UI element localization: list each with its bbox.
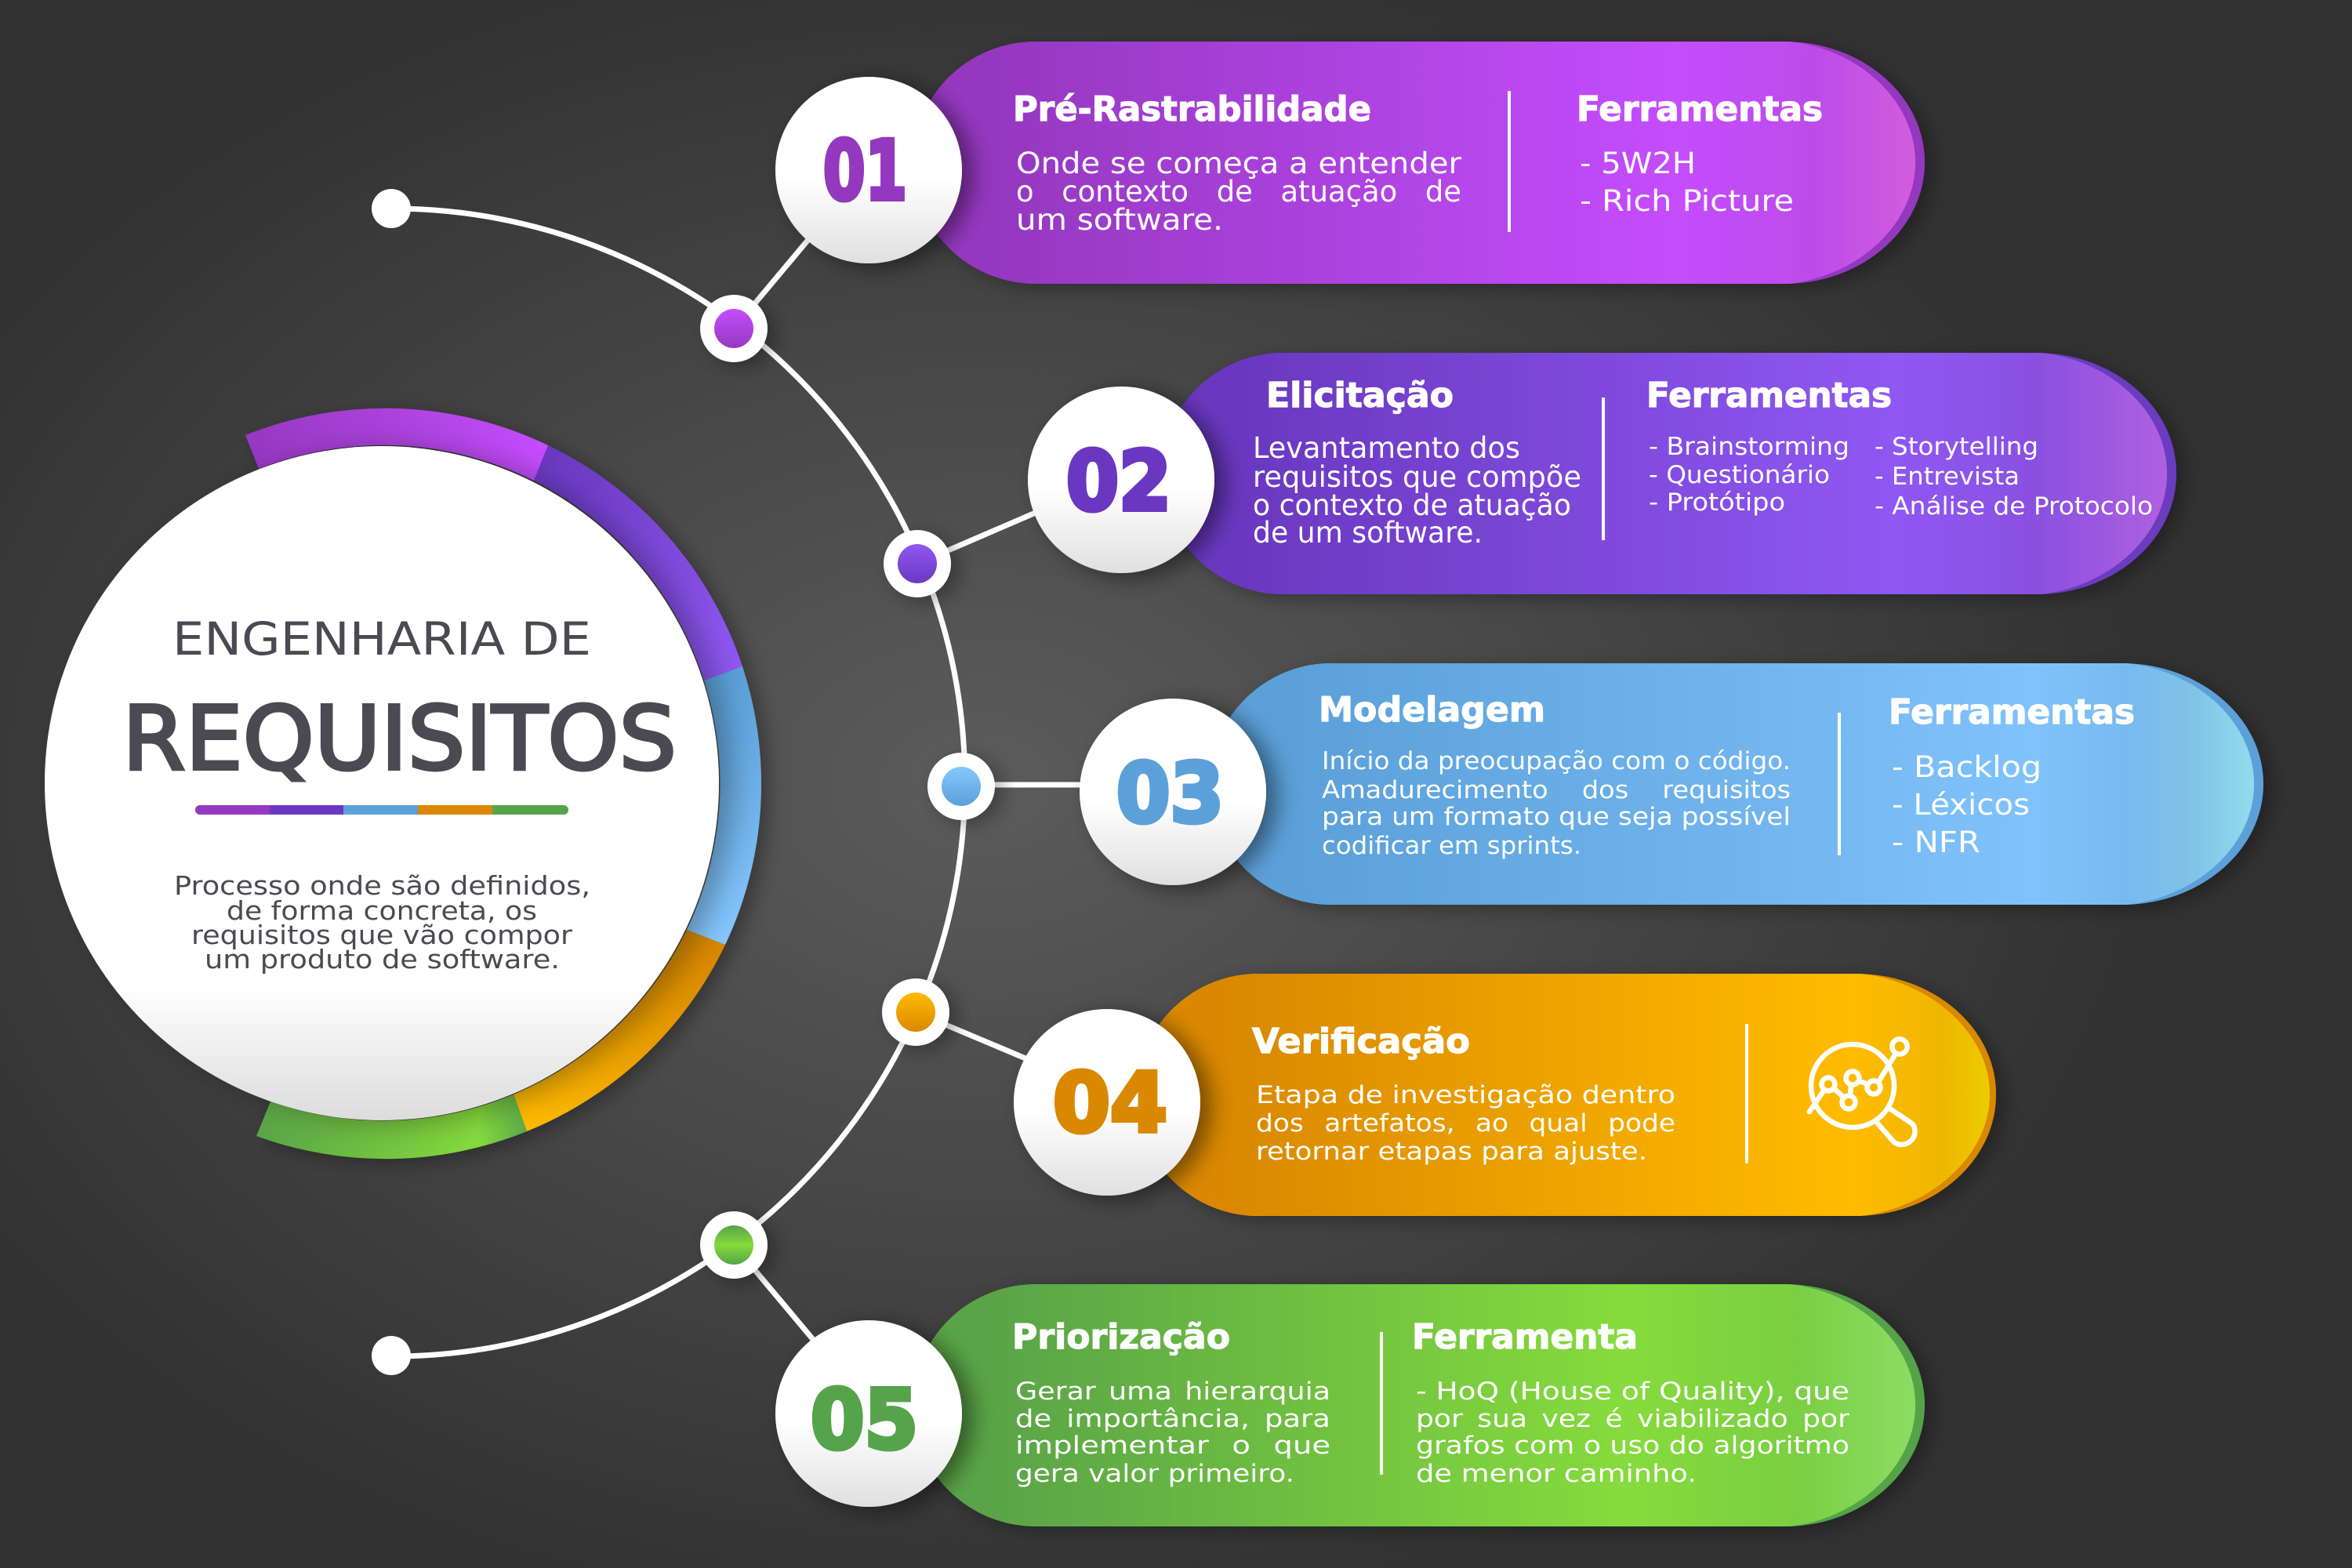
description: Início da preocupação com o código.: [1322, 747, 1791, 775]
icon: magnifier with chart: [1809, 1039, 1915, 1145]
tools description: - HoQ (House of Quality), que: [1416, 1377, 1849, 1406]
description: de importância, para: [1015, 1405, 1330, 1433]
heading: Modelagem: [1319, 690, 1545, 730]
central ring: five coloured arc segments: [245, 408, 761, 1159]
tools list: - 5W2H: [1580, 147, 1696, 180]
description: Amadurecimento dos requisitos: [1322, 776, 1791, 804]
node 01: [700, 295, 768, 362]
node 03: [927, 753, 995, 820]
tools list column one: - Brainstorming: [1649, 433, 1849, 461]
description: [1015, 1377, 1330, 1488]
central circle panel: [45, 446, 719, 1120]
arc end dot top: [372, 189, 411, 228]
number badge 04: 04: [1053, 1055, 1167, 1151]
panel 01: Pré-Rastrabilidade: [775, 42, 1925, 284]
main arc: [391, 209, 965, 1356]
divider: [1838, 713, 1841, 855]
description: de forma concreta, os: [227, 895, 537, 926]
tools list: [1892, 750, 2042, 859]
connector 05: [734, 1245, 815, 1342]
node 05: [700, 1211, 768, 1279]
tools description: grafos com o uso do algoritmo: [1416, 1432, 1849, 1460]
heading: Elicitação: [1266, 376, 1454, 416]
description: [174, 870, 590, 975]
tools list column two: [1875, 433, 2153, 521]
ring segment: purple: [245, 408, 548, 481]
description: [1016, 147, 1462, 237]
panel 05: Priorização: [775, 1284, 1925, 1526]
description: [1256, 1081, 1675, 1166]
pill 05: [913, 1284, 1925, 1526]
connector 01: [734, 231, 815, 328]
divider: [1508, 91, 1511, 232]
description: retornar etapas para ajuste.: [1256, 1138, 1647, 1166]
description: requisitos que vão compor: [191, 920, 572, 950]
connector 04: [916, 1012, 1035, 1062]
description: Processo onde são definidos,: [174, 870, 590, 901]
pill 01: [913, 42, 1925, 284]
divider: [1602, 397, 1605, 540]
pill 02: [1161, 353, 2176, 594]
ring segment: blue: [687, 666, 761, 945]
number badge 03: 03: [1116, 746, 1224, 841]
description: Levantamento dos: [1253, 431, 1520, 465]
ring segment: green: [256, 1094, 527, 1159]
tools heading: Ferramentas: [1577, 89, 1823, 129]
tools list column two: - Storytelling: [1875, 433, 2038, 461]
description: um software.: [1016, 203, 1223, 237]
description: o contexto de atuação: [1253, 488, 1571, 522]
description: um produto de software.: [205, 944, 560, 975]
tools list: - NFR: [1892, 826, 1980, 859]
description: Onde se começa a entender: [1016, 147, 1462, 180]
description: dos artefatos, ao qual pode: [1256, 1109, 1675, 1138]
colour bar: [195, 805, 568, 815]
tools heading: Ferramentas: [1646, 376, 1892, 416]
divider: [1380, 1332, 1383, 1475]
tools heading: Ferramentas: [1889, 692, 2135, 732]
tools list: - Rich Picture: [1580, 184, 1794, 218]
tools description: por sua vez é viabilizado por: [1416, 1405, 1849, 1433]
white disc: [45, 446, 719, 1120]
number badge 02: 02: [1066, 434, 1171, 529]
heading: Verificação: [1252, 1022, 1470, 1062]
number badge 04: [1014, 1009, 1200, 1196]
ring segment: violet: [534, 445, 742, 681]
tools description: [1416, 1377, 1849, 1488]
tools list column two: - Análise de Protocolo: [1875, 492, 2153, 521]
tools heading: Ferramenta: [1412, 1317, 1638, 1357]
panel 03: Modelagem: [1080, 663, 2263, 905]
description: Gerar uma hierarquia: [1015, 1377, 1330, 1406]
heading: Pré-Rastrabilidade: [1013, 89, 1371, 129]
tools list column one: - Questionário: [1649, 461, 1830, 489]
description: [1253, 431, 1581, 550]
tools description: de menor caminho.: [1416, 1460, 1697, 1488]
description: [1322, 747, 1791, 860]
connector 02: [917, 510, 1043, 564]
description: para um formato que seja possível: [1322, 803, 1791, 831]
pill 04: [1137, 974, 1996, 1216]
arc end dot bottom: [372, 1336, 411, 1375]
number badge 02: [1028, 387, 1214, 573]
description: Etapa de investigação dentro: [1256, 1081, 1675, 1109]
description: requisitos que compõe: [1253, 460, 1581, 494]
number badge 05: 05: [811, 1372, 918, 1468]
tools list: [1580, 147, 1794, 218]
tools list: - Backlog: [1892, 750, 2042, 784]
divider: [1745, 1024, 1748, 1163]
number badge 03: [1080, 699, 1266, 885]
heading: Priorização: [1012, 1317, 1230, 1357]
description: codificar em sprints.: [1322, 832, 1581, 860]
description: de um software.: [1253, 516, 1483, 550]
panel 02: Elicitação: [1028, 353, 2176, 594]
number badge 01: [775, 77, 962, 263]
timeline arc with connectors: [391, 209, 1086, 1356]
tools list column one: [1649, 433, 1849, 517]
number badge 05: [775, 1320, 962, 1507]
tools list column two: - Entrevista: [1875, 463, 2020, 491]
description: o contexto de atuação de: [1016, 175, 1461, 209]
title line one: ENGENHARIA DE: [172, 612, 591, 666]
ring segment: orange: [514, 930, 725, 1131]
description: gera valor primeiro.: [1015, 1460, 1294, 1488]
tools list: - Léxicos: [1892, 788, 2030, 822]
node 02: [884, 530, 951, 597]
panel 04: Verificação: [1014, 974, 1996, 1216]
title line two: REQUISITOS: [122, 688, 677, 790]
node 04: [882, 978, 949, 1046]
description: implementar o que: [1015, 1432, 1330, 1460]
pill 03: [1210, 663, 2263, 905]
connector 03: [961, 782, 1086, 787]
tools list column one: - Protótipo: [1649, 488, 1785, 517]
number badge 01: 01: [823, 123, 907, 219]
